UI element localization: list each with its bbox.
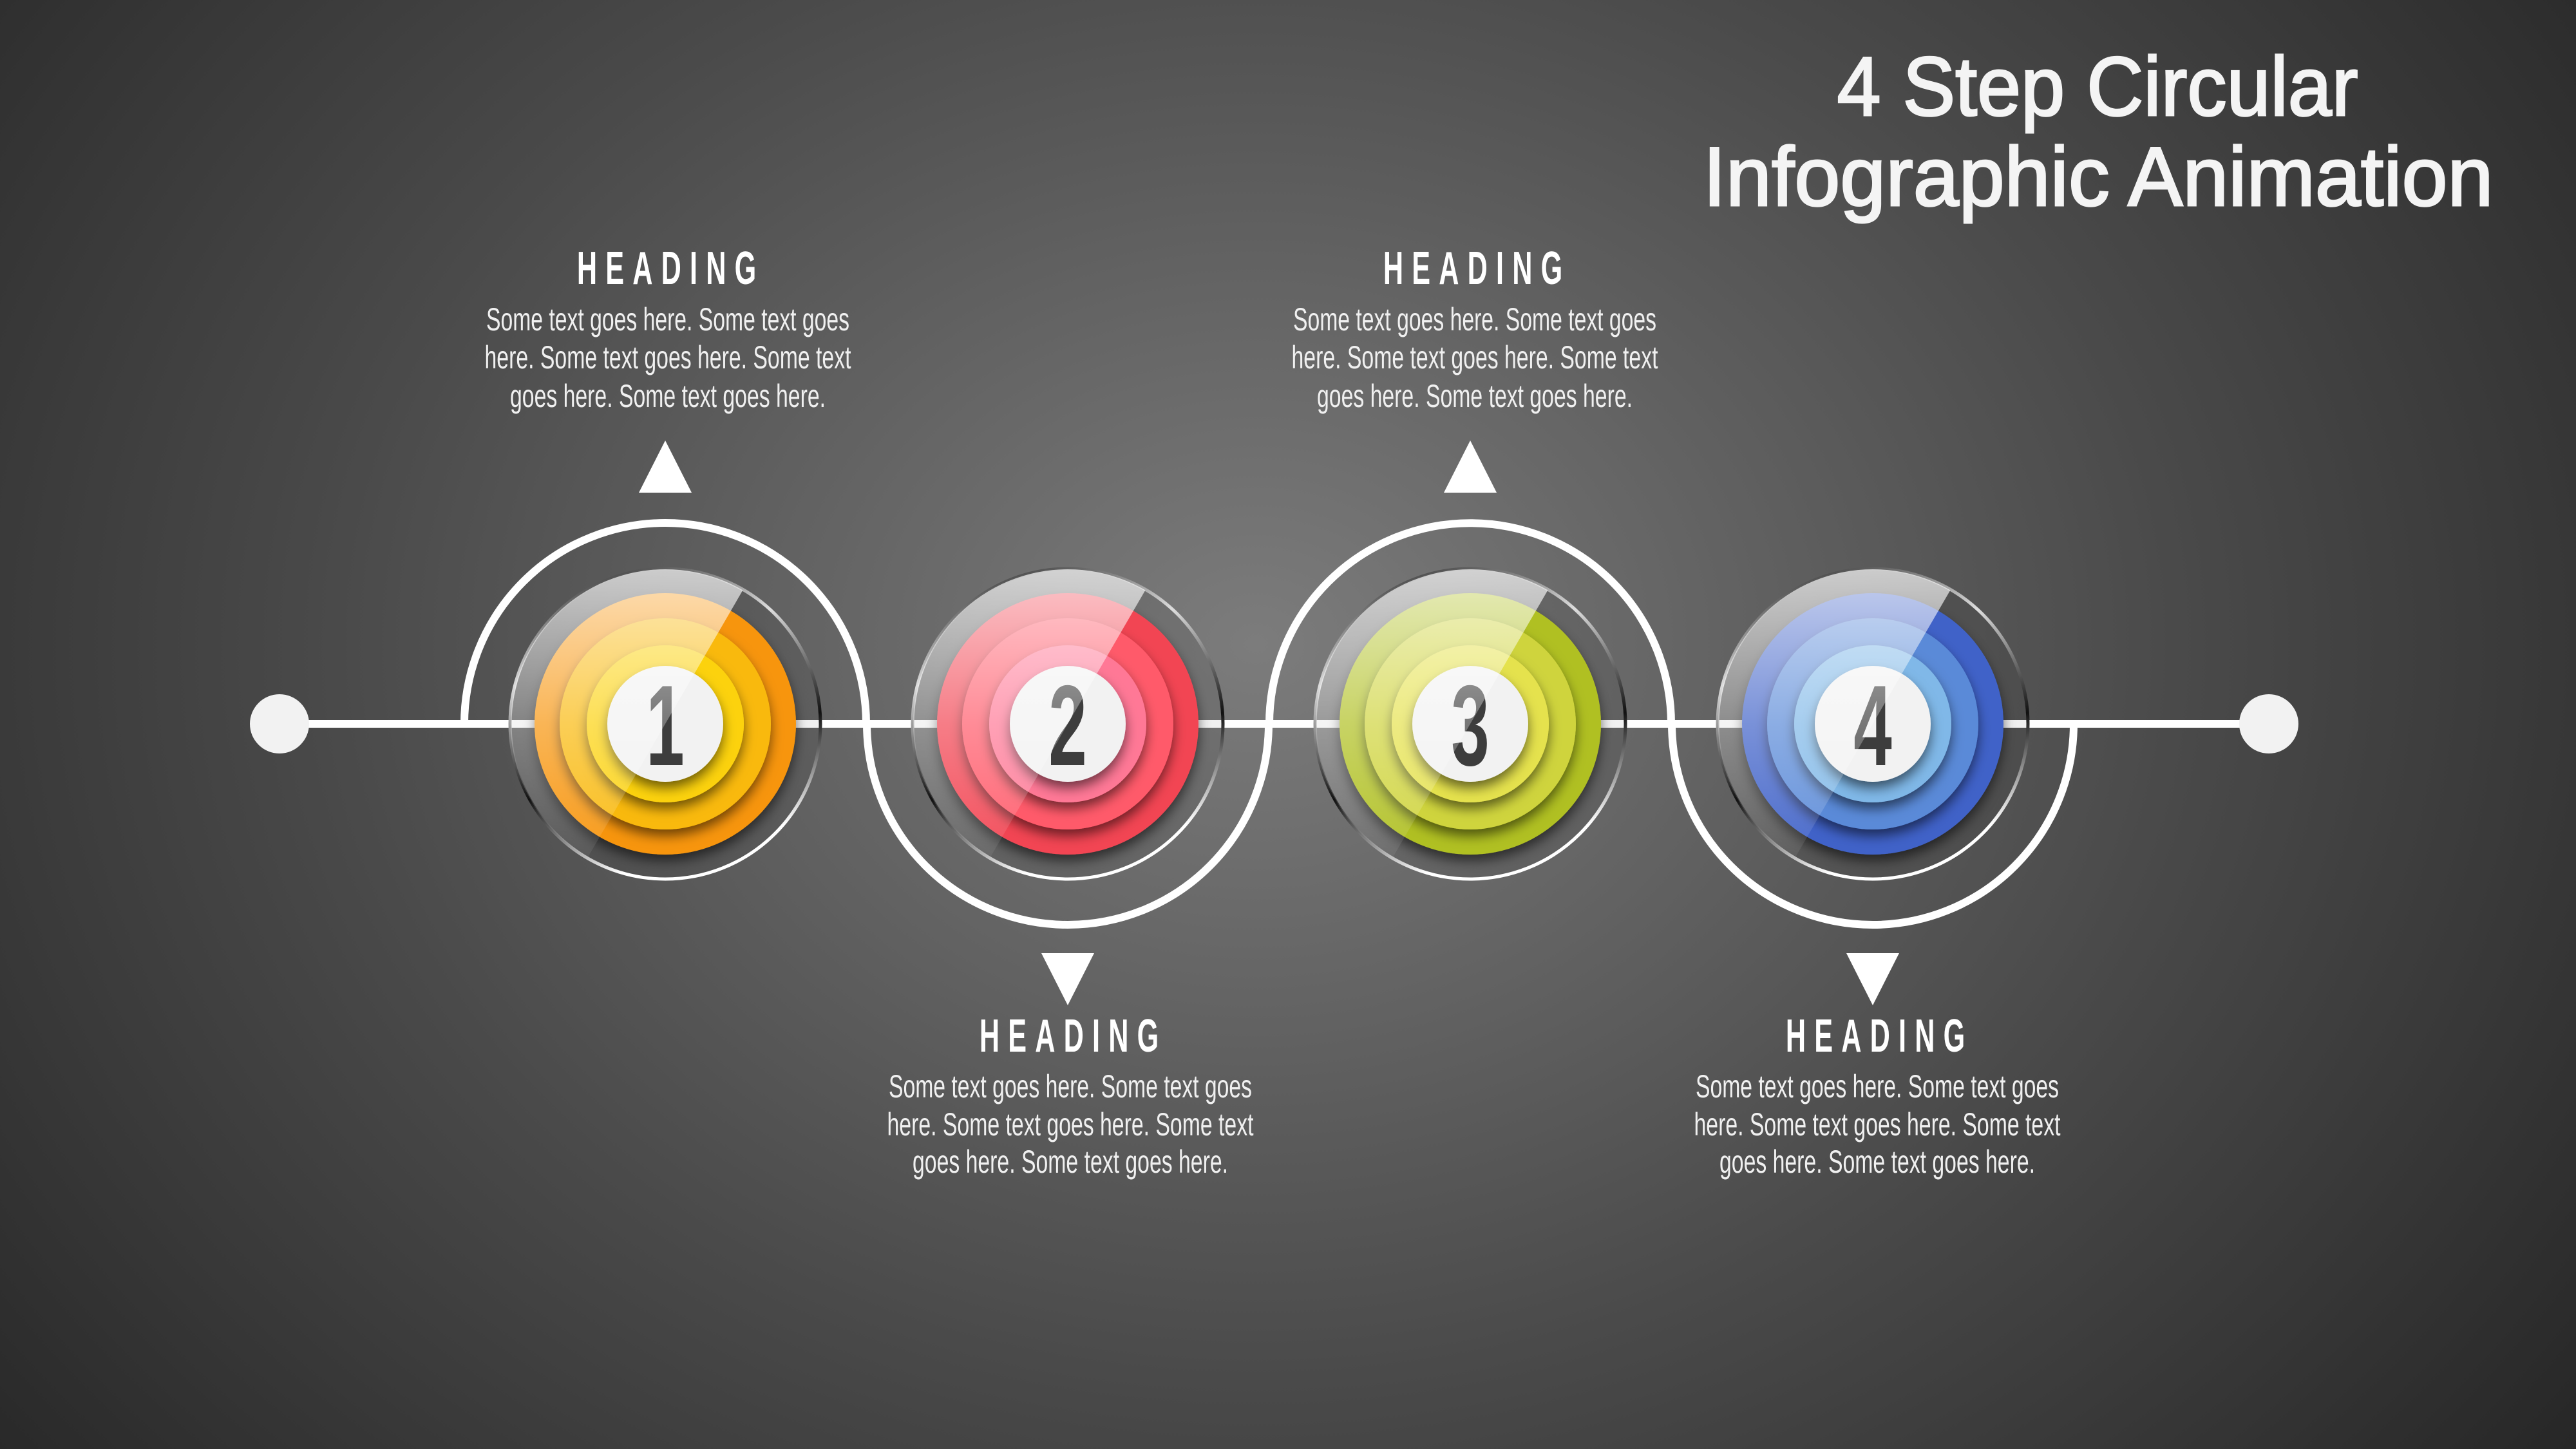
arrow down 4: [1846, 953, 1899, 1005]
text block 4: Some text goes here. Some text goes: [1696, 1068, 2059, 1104]
text block 4: [1694, 1010, 2061, 1180]
text block 1: [484, 242, 851, 414]
timeline path: [279, 523, 2269, 925]
text block 2: HEADING: [980, 1010, 1167, 1062]
text block 2: [887, 1010, 1254, 1180]
text block 2: goes here. Some text goes here.: [913, 1144, 1228, 1180]
text block 3: Some text goes here. Some text goes: [1293, 301, 1656, 337]
step 2 circle: 2: [1048, 662, 1087, 790]
title: 4 Step Circular: [1837, 39, 2358, 133]
text block 3: goes here. Some text goes here.: [1317, 378, 1633, 414]
step 4 circle: 4: [1853, 662, 1892, 790]
step 4 circle: [1716, 567, 2029, 880]
text block 1: goes here. Some text goes here.: [510, 378, 826, 414]
text block 1: HEADING: [577, 242, 764, 294]
title: [1703, 39, 2494, 223]
text block 1: Some text goes here. Some text goes: [486, 301, 849, 337]
text block 3: HEADING: [1383, 242, 1571, 294]
text block 1: here. Some text goes here. Some text: [484, 339, 851, 375]
arrow up 3: [1444, 440, 1497, 493]
arrow down 2: [1041, 953, 1094, 1005]
step 3 circle: [1314, 567, 1627, 880]
text block 2: here. Some text goes here. Some text: [887, 1106, 1254, 1142]
text block 4: goes here. Some text goes here.: [1719, 1144, 2035, 1180]
right end dot: [2239, 694, 2298, 753]
left end dot: [250, 694, 309, 753]
text block 2: Some text goes here. Some text goes: [889, 1068, 1252, 1104]
text block 3: here. Some text goes here. Some text: [1292, 339, 1658, 375]
step 2 circle: [911, 567, 1224, 880]
text block 4: HEADING: [1786, 1010, 1973, 1062]
step 3 circle: 3: [1451, 662, 1490, 790]
step 1 circle: 1: [646, 662, 685, 790]
text block 3: [1292, 242, 1658, 414]
step 1 circle: [509, 567, 822, 880]
arrow up 1: [639, 440, 692, 493]
title: Infographic Animation: [1703, 129, 2494, 223]
text block 4: here. Some text goes here. Some text: [1694, 1106, 2061, 1142]
